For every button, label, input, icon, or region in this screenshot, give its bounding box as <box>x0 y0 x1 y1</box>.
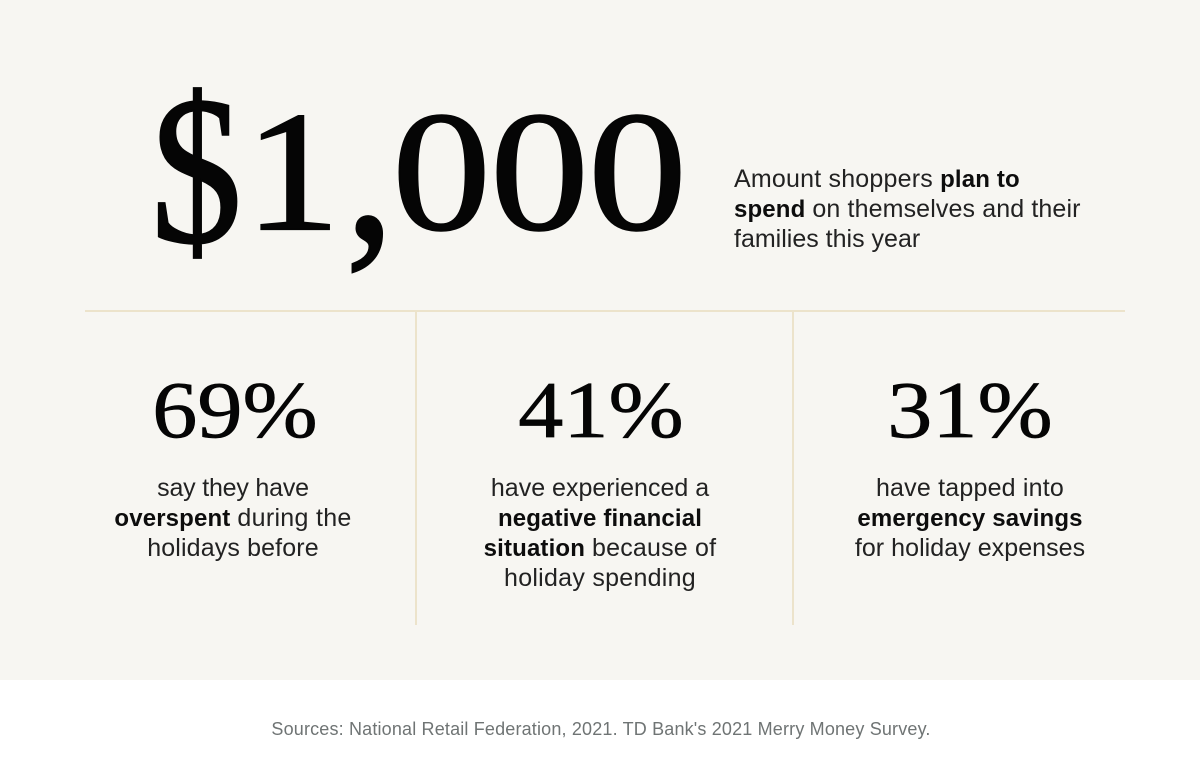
stat column: 31% <box>855 365 1085 562</box>
headline figure: $1,000: 0 <box>490 77 589 267</box>
stat number 41%: 41% <box>518 365 684 455</box>
stat number 31%: 31% <box>887 365 1053 455</box>
horizontal divider <box>85 310 1125 312</box>
sources footer: Sources: National Retail Federation, 2021. TD Bank's 2021 Merry Money Survey. <box>271 719 931 739</box>
stat text emergency savings <box>855 474 1085 562</box>
headline figure: $1,000 <box>151 45 687 288</box>
stat text negative financial situation: holiday spending <box>504 564 696 592</box>
vertical divider left <box>415 312 417 625</box>
stat text emergency savings: for holiday expenses <box>855 534 1085 562</box>
stat column: 41% <box>484 365 716 592</box>
stat text negative financial situation: have experienced a <box>491 474 709 502</box>
headline description: spend on themselves and their <box>734 195 1081 223</box>
stat text negative financial situation <box>484 474 716 592</box>
stat text negative financial situation: negative financial <box>498 505 702 532</box>
stat text overspent: say they have <box>157 474 309 502</box>
stat text emergency savings: emergency savings <box>857 505 1083 532</box>
headline figure: $1,000: $ <box>151 53 242 288</box>
stat number 69%: 69% <box>152 365 318 455</box>
stat column: 69% <box>114 365 352 562</box>
headline figure: $1,000: 0 <box>392 77 491 267</box>
stat text negative financial situation: situation because of <box>484 534 716 562</box>
headline figure: $1,000: , <box>345 45 394 286</box>
headline figure: $1,000: 0 <box>588 77 687 267</box>
headline description: Amount shoppers plan to <box>734 165 1020 193</box>
headline figure: $1,000: 1 <box>244 77 341 267</box>
vertical divider right <box>792 312 794 625</box>
headline description: families this year <box>734 225 920 253</box>
headline description <box>734 165 1081 253</box>
stat text overspent: overspent during the <box>114 504 352 532</box>
stat text emergency savings: have tapped into <box>876 474 1064 502</box>
stat text overspent: holidays before <box>147 534 319 562</box>
stat text overspent <box>114 474 352 562</box>
